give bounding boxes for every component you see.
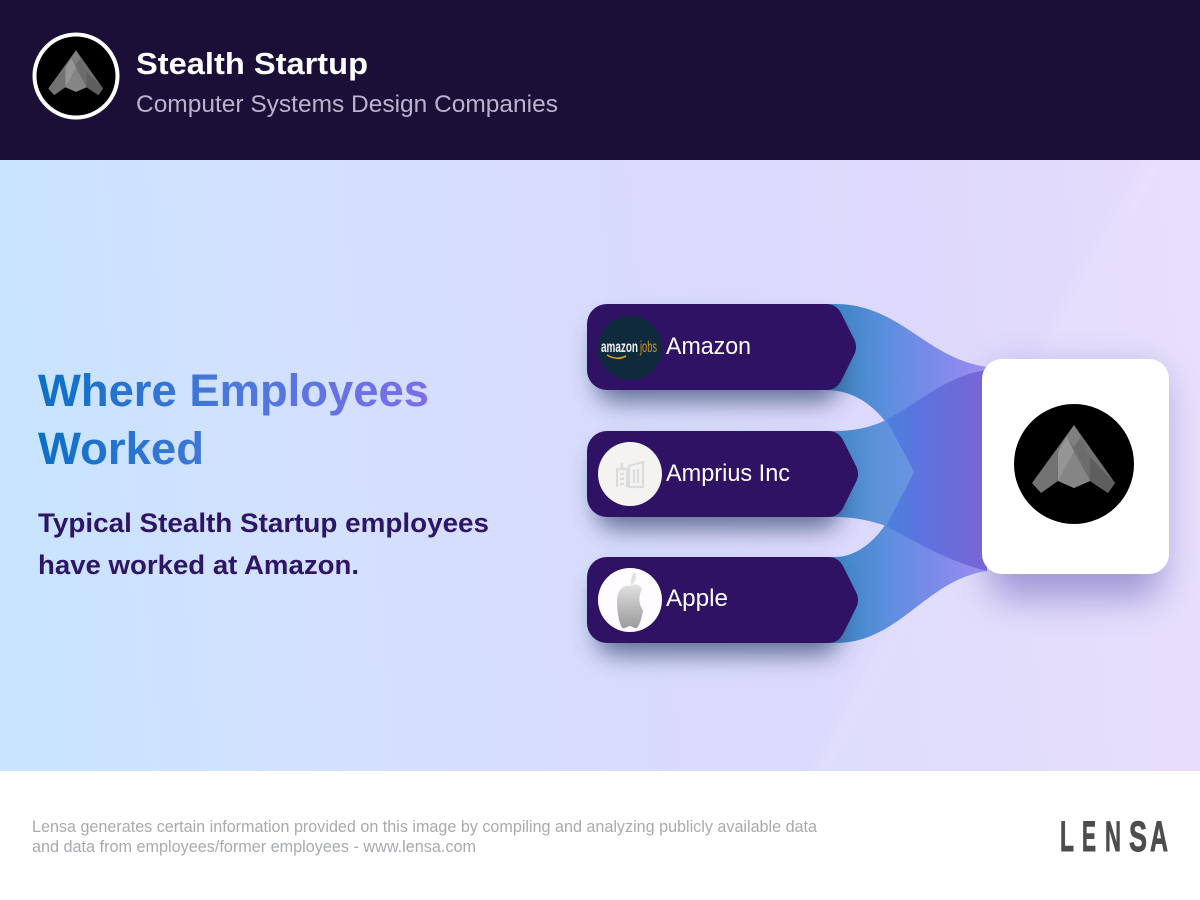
ribbon: apple bbox=[825, 470, 987, 643]
ribbon overlap bbox=[886, 370, 987, 571]
header company name: Stealth Startup bbox=[136, 46, 368, 81]
icon: amazon jobs logo bbox=[598, 316, 662, 380]
label: amprius inc: Amprius Inc bbox=[666, 460, 790, 487]
footer disclaimer: and data from employees/former employees - www.lensa.com bbox=[32, 838, 476, 856]
ribbon: amprius bbox=[825, 420, 914, 526]
ribbon: amazon bbox=[825, 304, 987, 472]
pill shadows bbox=[596, 322, 840, 655]
lensa logo: N bbox=[1105, 813, 1121, 861]
icon: building placeholder bbox=[598, 442, 662, 506]
header company logo bbox=[34, 34, 118, 118]
company row: amazon bbox=[587, 304, 856, 390]
card company logo bbox=[1014, 404, 1134, 524]
footer band bbox=[0, 771, 1200, 900]
label: apple: Apple bbox=[666, 585, 728, 612]
description text: Typical Stealth Startup employees bbox=[38, 508, 489, 538]
company row: apple bbox=[587, 557, 858, 643]
icon: amazon jobs logo: jobs bbox=[639, 339, 657, 356]
description text: have worked at Amazon. bbox=[38, 550, 359, 580]
lensa logo: L bbox=[1060, 813, 1074, 861]
heading: where employees worked: Worked bbox=[38, 423, 204, 474]
header band bbox=[0, 0, 1200, 160]
icon: amazon jobs logo: amazon bbox=[601, 339, 638, 356]
footer disclaimer: Lensa generates certain information provided on this image by compiling and analyzing publicly available data bbox=[32, 818, 818, 836]
header subtitle: Computer Systems Design Companies bbox=[136, 91, 558, 118]
icon: apple logo bbox=[598, 568, 662, 632]
lensa logo: S bbox=[1129, 813, 1147, 861]
main background panel bbox=[0, 150, 1200, 790]
lensa logo bbox=[1060, 813, 1168, 861]
heading: where employees worked: Where Employees bbox=[38, 365, 429, 416]
lensa logo: E bbox=[1082, 813, 1096, 861]
lensa logo: A bbox=[1150, 813, 1168, 861]
sankey flow ribbons bbox=[825, 304, 987, 643]
card shadow bbox=[990, 372, 1162, 598]
target company card bbox=[982, 359, 1169, 574]
company row: amprius inc bbox=[587, 431, 858, 517]
label: amazon: Amazon bbox=[666, 333, 751, 360]
